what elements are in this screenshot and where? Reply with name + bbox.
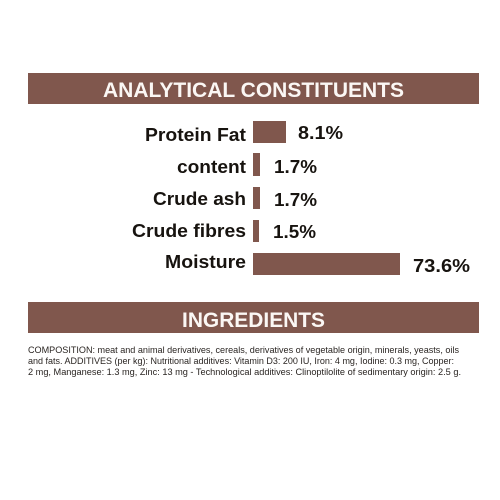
row: moisture: Moisture bbox=[165, 252, 246, 272]
text block: composition: 2 mg, Manganese: 1.3 mg, Zinc: 13 mg - Technological additives: Clinoptilolite of sedimentary origin: 2.5 g. bbox=[28, 367, 461, 377]
panel: ingredients header bbox=[28, 302, 479, 333]
heading: analytical constituents: ANALYTICAL CONSTITUENTS bbox=[103, 79, 404, 102]
text block: composition bbox=[28, 345, 461, 377]
row: protein fat: Protein Fat bbox=[145, 125, 246, 145]
row: protein fat bbox=[145, 121, 343, 145]
row: protein fat: 8.1% bbox=[298, 123, 343, 143]
row: crude fibres: Crude fibres bbox=[132, 221, 246, 241]
text block: composition: and fats. ADDITIVES (per kg): Nutritional additives: Vitamin D3: 200 IU, Iron: 4 mg, Iodine: 0.3 mg, Copper: bbox=[28, 356, 454, 366]
bar chart: constituents bbox=[132, 121, 470, 276]
row: moisture bbox=[165, 252, 470, 276]
row: content bbox=[177, 153, 317, 177]
row: crude fibres bbox=[132, 220, 316, 242]
text block: composition: COMPOSITION: meat and animal derivatives, cereals, derivatives of vegetable origin, minerals, yeasts, oils bbox=[28, 345, 459, 355]
row: content: 1.7% bbox=[274, 157, 317, 177]
row: crude ash: Crude ash bbox=[153, 189, 246, 209]
panel: analytical constituents header bbox=[28, 73, 479, 104]
row: content: content bbox=[177, 157, 246, 177]
row: moisture: 73.6% bbox=[413, 256, 470, 276]
heading: ingredients: INGREDIENTS bbox=[182, 309, 325, 332]
row: crude fibres: 1.5% bbox=[273, 222, 316, 242]
row: crude ash: 1.7% bbox=[274, 190, 317, 210]
row: crude ash bbox=[153, 187, 317, 210]
